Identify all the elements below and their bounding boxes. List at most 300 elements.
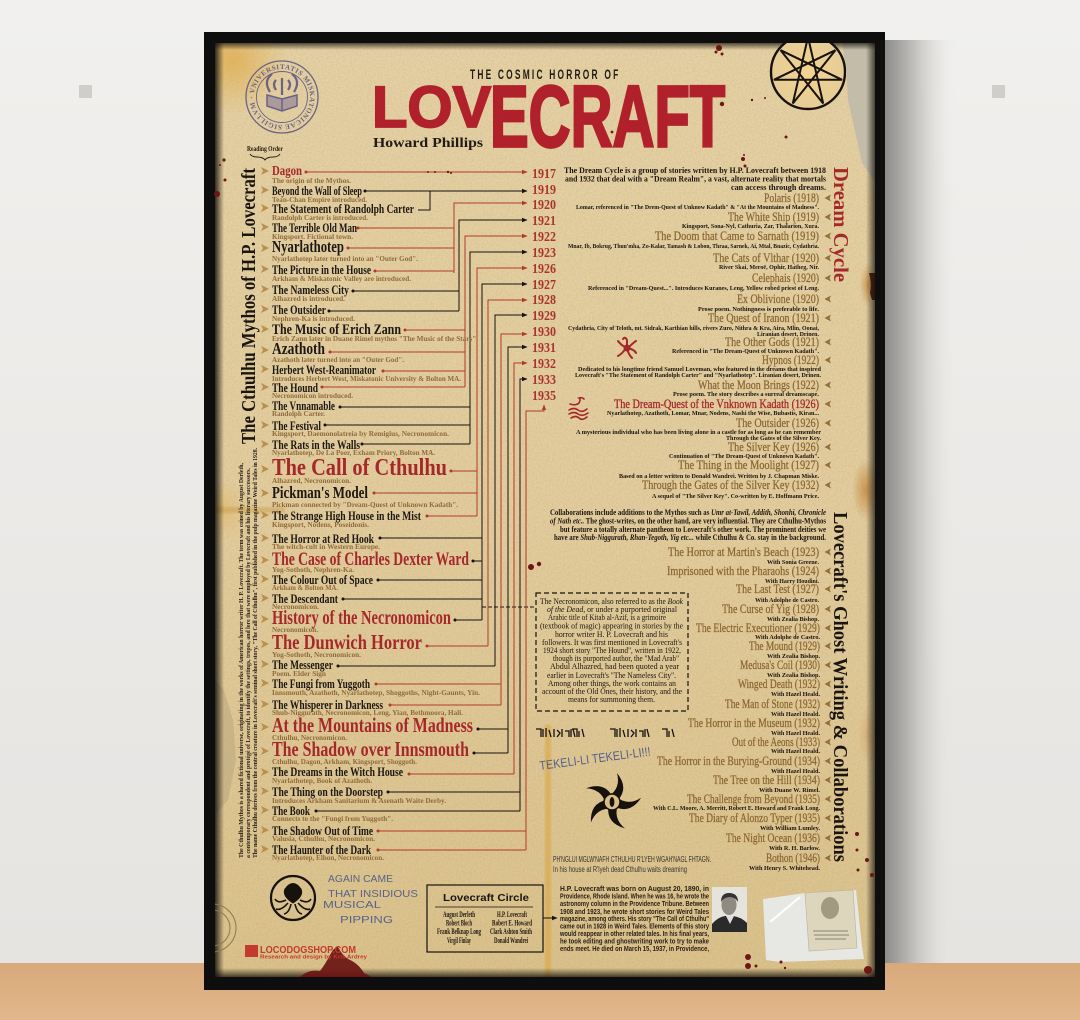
dream cycle story: Celephais [588, 271, 831, 292]
dream cycle intro text: can access through dreams. [731, 183, 826, 192]
collaboration: The Horror at Martin's Beach: With Sonia Greene. [767, 559, 819, 566]
vertical heading: Dream Cycle: Dream Cycle [829, 167, 853, 282]
poster frame [204, 32, 885, 990]
collaboration: The Curse of Yig: The Curse of Yig (1928) [722, 602, 819, 616]
callout: Necronomicon box: of the Dead, or under a purported original [547, 604, 678, 614]
publication years: 1933 [532, 373, 556, 388]
publication years: 1919 [532, 183, 556, 198]
mythos story: Herbert West-Reanimator: Introduces Herbert West, Miskatonic University & Bolton MA. [272, 375, 461, 383]
collaboration: The Last Test [736, 582, 831, 604]
dream cycle story: Hypnos: Lovecraft's "The Statement of Randolph Carter" and "Nyarlathotep". Liranian desert, Drinen. [575, 372, 821, 379]
biography text: he took editing and ghostwriting work to try to make [560, 938, 709, 946]
collaboration: Bothon: Bothon (1946) [766, 851, 820, 865]
panel: Lovecraft Circle: Lovecraft Circle [443, 892, 529, 904]
collaboration: The Man of Stone: With Hazel Heald. [771, 711, 820, 718]
publication years: 1921 [532, 214, 556, 229]
mythos story: Pickman's Model: Pickman's Model [272, 483, 368, 502]
mythos story: Herbert West-Reanimator [261, 363, 461, 383]
mythos story: The Dreams in the Witch House: The Dreams in the Witch House [272, 765, 403, 779]
mythos story: The Haunter of the Dark: Nyarlathotep, Elhon, Necronomicon. [272, 854, 384, 862]
mythos story: The Thing on the Doorstep: The Thing on the Doorstep [272, 785, 383, 799]
mythos story: The Messenger: The Messenger [272, 658, 333, 672]
handwritten: quote: THAT INSIDIOUS [328, 888, 418, 900]
collaboration: Medusa's Coil: With Zealia Bishop. [767, 672, 820, 679]
biography text: H.P. Lovecraft was born on August 20, 1890, in [560, 886, 709, 893]
collaboration: The Electric Executioner [696, 621, 831, 641]
mythos story: The Shadow over Innsmouth: The Shadow over Innsmouth [272, 737, 469, 761]
mythos story: The Shadow Out of Time: The Shadow Out of Time [272, 824, 373, 838]
mythos story: The Unnamable: Randolph Carter. [272, 410, 325, 418]
mythos story: Azathoth [261, 339, 404, 364]
mythos story: The Rats in the Walls: Nyarlathotep, De La Poer, Exham Priory, Bolton MA. [272, 449, 435, 457]
icon: swirling star eye [583, 773, 643, 832]
dream cycle story: Celephais: Referenced in "Dream-Quest...". Introduces Kuranes, Leng, Yellow robed priest of Leng. [588, 285, 819, 292]
mythos story: The Terrible Old Man [261, 221, 357, 241]
collaboration: The Electric Executioner: With Adolphe de Castro. [755, 634, 820, 641]
collaboration: The Diary of Alonzo Typer: The Diary of Alonzo Typer (1935) [689, 811, 820, 825]
mythos story: The Picture in the House: The Picture in the House [272, 263, 371, 277]
dream cycle story: The White Ship: Kingsport, Sona-Nyl, Cathuria, Zar, Thalarion, Xura. [682, 223, 819, 230]
mythos story: The Thing on the Doorstep: Introduces Arkham Sanitarium & Asenath Waite Derby. [272, 797, 446, 805]
mythos story: The Fungi from Yuggoth [261, 677, 480, 697]
collaboration: Imprisoned with the Pharaohs: With Harry Houdini. [765, 578, 819, 585]
dream cycle story: The Silver Key: Continuation of "The Dream-Quest of Unknown Kadath". [669, 453, 819, 460]
handwritten: Tekeli-li: TEKELI-LI TEKELI-LI!!! [539, 744, 651, 773]
mythos story: The Descendant: The Descendant [272, 592, 339, 606]
mythos story: Dagon [261, 164, 351, 185]
icon: Cthulhu emblem [271, 876, 315, 920]
dream cycle story: The Cats of Ulthar: The Cats of Vlthar (1920) [713, 251, 819, 265]
collaboration: The Challenge from Beyond: The Challenge from Beyond (1935) [687, 792, 820, 806]
dream cycle intro text [564, 166, 826, 192]
collaboration: Out of the Aeons: Out of the Aeons (1933) [732, 735, 820, 749]
biography text: came out in 1928 in Weird Tales. Elements of this story [560, 924, 709, 930]
mythos story: The Fungi from Yuggoth: Innsmouth, Azathoth, Nyarlathotep, Shoggoths, Night-Gaunts, Yin. [272, 689, 480, 697]
mythos story: At the Mountains of Madness [261, 713, 473, 742]
collaboration: The Diary of Alonzo Typer: With William Lumley. [760, 825, 820, 832]
mythos story: The Case of Charles Dexter Ward: The Case of Charles Dexter Ward [272, 549, 469, 570]
collaboration: The Man of Stone [725, 697, 831, 718]
mythos story: The Hound: Necronomicon introduced. [272, 392, 353, 400]
mythos story: Azathoth: Azathoth [272, 339, 325, 358]
icon: red wave glyph [569, 398, 588, 419]
collaborations intro text: have are Shub-Niggurath, Rhan-Tegoth, Yig etc... while Cthulhu & Co. stay in the background. [554, 533, 826, 542]
publication years: 1923 [532, 246, 556, 261]
mythos story: The Rats in the Walls [261, 438, 435, 457]
mythos story: The Whisperer in Darkness: Shub-Niggurath, Necronomicon, Leng, Yian, Bethmoora, Hali. [272, 709, 463, 717]
vertical heading: Ghost Writing and Collaborations: Lovecraft's Ghost Writing & Collaborations [829, 512, 851, 862]
collaboration: The Horror in the Burying-Ground: With Hazel Heald. [771, 768, 820, 775]
mythos story: The Festival: The Festival [272, 419, 321, 433]
publication years: 1922 [532, 230, 556, 245]
dream cycle intro text: and 1932 that deal with a "Dream Realm", a vast, alternate reality that mortals [565, 174, 826, 184]
handwritten: Cthulhu chant: In his house at R'lyeh dead Cthulhu waits dreaming [553, 865, 687, 874]
mythos story: The Descendant: Necronomicon. [272, 603, 319, 611]
icon: red tentacle star [618, 338, 636, 358]
mythos story: History of the Necronomicon: Necronomicon. [272, 626, 318, 634]
mythos story: The Outsider: Nephren-Ka is introduced. [272, 315, 355, 323]
collaboration: Winged Death: With Hazel Heald. [771, 691, 820, 698]
reading order timeline connectors [306, 172, 544, 850]
mythos story: The Outsider: The Outsider [272, 303, 326, 317]
callout: Necronomicon box: though its purported author, the "Mad Arab" [553, 653, 679, 663]
mythos story: The Horror at Red Hook [261, 532, 380, 551]
collaboration: The Curse of Yig: With Zealia Bishop. [767, 616, 819, 623]
mythos story: The Outsider [261, 303, 355, 323]
dream cycle intro text: The Dream Cycle is a group of stories written by H.P. Lovecraft between 1918 [564, 166, 826, 175]
necronomicon sign [771, 35, 845, 109]
mythos story: Dagon: Dagon [272, 164, 302, 179]
collaboration: The Night Ocean: With R. H. Barlow. [769, 845, 820, 852]
panel: Lovecraft Circle: Clark Ashton Smith [490, 927, 532, 936]
mythos story: The Strange High House in the Mist [261, 509, 422, 529]
mythos story: The Book: Connects to the "Fungi from Yuggoth". [272, 815, 393, 823]
collaborations intro text [550, 508, 826, 542]
reading order label [247, 144, 283, 160]
collaboration: The Tree on the Hill: The Tree on the Hill (1934) [713, 773, 820, 787]
handwritten: quote: AGAIN CAME [328, 873, 393, 885]
collaboration: The Mound: With Zealia Bishop. [767, 653, 820, 660]
mythos story: The Statement of Randolph Carter: Randolph Carter is introduced. [272, 214, 368, 222]
collaboration: Medusa's Coil [740, 658, 831, 679]
collaboration: Medusa's Coil: Medusa's Coil (1930) [740, 658, 820, 672]
collaboration: The Horror in the Museum [688, 716, 831, 737]
mythos story: The Dreams in the Witch House: Nyarlathotep, Book of Azathoth. [272, 777, 372, 785]
biography text [559, 886, 709, 953]
vertical heading: Cthulhu Mythos: The Cthulhu Mythos of H.P. Lovecraft [238, 168, 260, 444]
mythos story: The Nameless City [261, 283, 349, 303]
logo: locodogshop: LOCODOGSHOP.COM [260, 945, 356, 956]
mythos story: Dagon: The origin of the Mythos. [272, 177, 351, 185]
mythos story: The Hound [261, 381, 353, 400]
mythos story: The Thing on the Doorstep [261, 785, 446, 805]
mythos story: Azathoth: Azathoth later turned into an "Outer God". [272, 356, 404, 364]
mythos story: The Statement of Randolph Carter: The Statement of Randolph Carter [272, 202, 414, 216]
collaboration: Winged Death: Winged Death (1932) [738, 677, 820, 691]
dream cycle story: What the Moon Brings: What the Moon Brings (1922) [698, 378, 819, 392]
dream cycle story: Hypnos [575, 353, 831, 379]
callout: Necronomicon box: The Necronomicon, also referred to as the Book [540, 596, 683, 606]
biography text: magazine, among others. His story "The Call of Cthulhu" [560, 916, 709, 923]
aged paper sheet [177, 5, 880, 977]
publication years: 1935 [532, 389, 556, 404]
mythos story: The Unnamable [261, 399, 335, 418]
handwritten: quote: MUSICAL [323, 899, 381, 911]
dream cycle story: The Cats of Ulthar: River Skai, Meroë, Ophir, Hatheg, Nir. [719, 264, 819, 271]
logo: locodogshop [245, 945, 368, 960]
wooden shelf [0, 963, 1080, 1020]
mythos story: The Statement of Randolph Carter [261, 202, 414, 222]
mythos story: The Picture in the House: Arkham & Miskatonic Valley are introduced. [272, 275, 411, 283]
mythos story: The Horror at Red Hook: The witch-cult in Western Europe. [272, 543, 380, 551]
collaboration: The Electric Executioner: The Electric Executioner (1929) [696, 621, 820, 635]
mythos story: The Colour Out of Space [261, 573, 373, 592]
dream cycle story: The Dream-Quest of Unknown Kadath: Nyarlathotep, Azathoth, Lomar, Mnar, Nodens, Nashi the Wise, Bubastis, Kiran... [607, 410, 819, 417]
dream cycle story: The Thing in the Moonlight: The Thing in the Moolight (1927) [678, 458, 819, 472]
dream cycle story: Hypnos: Dedicated to his longtime friend Samuel Loveman, who featured in the dreams that inspired [578, 366, 821, 373]
dream cycle story: The Other Gods: Referenced in "The Dream-Quest of Unknown Kadath". [672, 348, 819, 355]
dream cycle story: The Doom that Came to Sarnath: Mnar, Ib, Bokrug, Thuu'mha, Zo-Kalar, Tamash & Lobon, Thraa, Sarnek, Ai, Mtal, Bnazic, Cydathria. [568, 243, 819, 250]
biography text: would reappear in other related tales. In his final years, [559, 931, 709, 938]
mythos story: The Horror at Red Hook: The Horror at Red Hook [272, 532, 375, 546]
mythos story: The Case of Charles Dexter Ward [261, 549, 469, 574]
header: Howard Phillips: Howard Phillips [373, 135, 483, 150]
mythos story: The Book [261, 804, 393, 823]
mythos story: The Dunwich Horror: The Dunwich Horror [272, 630, 422, 654]
publication years: 1928 [532, 293, 556, 308]
collaboration: The Last Test: The Last Test (1927) [736, 582, 819, 596]
wall plugs [79, 85, 1005, 98]
vertical text: mythos explanation: The Cthulhu Mythos is a shared fictional universe, originating in the works of American horror writer H. P. Lovecraft. The term was coined by August Derleth, [238, 463, 245, 858]
collaboration: The Tree on the Hill: With Duane W. Rimel. [759, 787, 820, 794]
collaboration: Bothon [749, 851, 831, 872]
publication years: 1932 [532, 357, 556, 372]
collaboration: The Night Ocean [726, 831, 831, 852]
pinned paper scraps with sketch [763, 890, 864, 962]
callout: Necronomicon box: Arabic title of Kitab al-Azif, is a grimoire [548, 612, 666, 622]
mythos story: The Terrible Old Man: The Terrible Old Man [272, 221, 357, 235]
blood splat bottom [300, 947, 372, 977]
portrait of Lovecraft [712, 887, 747, 932]
callout: Necronomicon box: followers. It was first mentioned in Lovecraft's [542, 637, 682, 647]
mythos story: The Festival: Kingsport, Daemonolatreia by Remigius, Necronomicon. [272, 430, 449, 438]
collaboration: Out of the Aeons: With Hazel Heald. [771, 748, 820, 755]
collaboration: The Mound [749, 639, 831, 660]
collaboration: Imprisoned with the Pharaohs [667, 564, 831, 585]
dream cycle story: Through the Gates of the Silver Key [642, 478, 831, 500]
mythos story: History of the Necronomicon [261, 607, 451, 634]
collaboration: The Challenge from Beyond: With C.L. Moore, A. Merritt, Robert E. Howard and Frank Long. [653, 805, 820, 812]
dream cycle story: The White Ship [682, 210, 831, 230]
handwritten: Cthulhu chant [553, 854, 711, 874]
publication years [532, 167, 556, 404]
collaboration: Winged Death [738, 677, 831, 698]
dream cycle story: The Cats of Ulthar [713, 251, 831, 271]
strange script row [536, 728, 674, 737]
dream cycle story: The White Ship: The White Ship (1919) [728, 210, 819, 224]
dream cycle story: The Outsider: A mysterious individual who has been living alone in a castle for as long as he can remember [576, 429, 821, 436]
mythos story: The Messenger [261, 658, 333, 678]
dream cycle story: The Silver Key: The Silver Key (1926) [728, 440, 819, 454]
publication years: 1931 [532, 341, 556, 356]
mythos story: The Call of Cthulhu: The Call of Cthulhu [272, 455, 447, 481]
mythos story: Beyond the Wall of Sleep: Tean-Chan Empire introduced. [272, 196, 367, 204]
dream cycle story: The Doom that Came to Sarnath: The Doom that Came to Sarnath (1919) [655, 229, 819, 243]
panel: Lovecraft Circle: H.P. Lovecraft [497, 910, 527, 919]
dream cycle story: Hypnos: Hypnos (1922) [762, 353, 819, 367]
collaboration: The Curse of Yig [722, 602, 831, 623]
mythos story: The Rats in the Walls: The Rats in the Walls [272, 438, 360, 452]
biography text: 1908 and 1923, he wrote short stories for Weird Tales [560, 909, 709, 916]
logo: locodogshop: Research and design by Kris Ardrey [260, 954, 368, 960]
callout: Necronomicon box: earlier in Lovecraft's "The Nameless City". [547, 670, 676, 680]
collaboration: The Last Test: With Adolphe de Castro. [755, 597, 819, 604]
collaboration: Out of the Aeons [732, 735, 831, 755]
mythos story: The Shadow Out of Time [261, 824, 375, 843]
university seal [245, 60, 319, 134]
dream cycle story: The Outsider: The Outsider (1926) [736, 416, 819, 430]
mythos story: The Messenger: Poem. Elder Sign [272, 670, 326, 678]
dream cycle story: The Thing in the Moonlight: Based on a letter written to Donald Wandrei. Written by J. Chapman Miske. [619, 473, 819, 480]
reading order label: Reading Order [247, 144, 283, 153]
mythos story: The Whisperer in Darkness [261, 698, 463, 717]
mythos story: Pickman's Model [261, 483, 458, 509]
panel: Lovecraft Circle: Robert Bloch [446, 918, 472, 928]
mythos story: The Dunwich Horror: Yog-Sothoth, Necronomicon. [272, 651, 361, 659]
collaborations intro text: of Nath etc.. The ghost-writes, on the other hand, are very influential. They are Cthulhu-Mythos [550, 516, 826, 526]
vertical text: mythos explanation [238, 448, 259, 858]
mythos story: The Hound: The Hound [272, 381, 318, 395]
publication years: 1920 [532, 198, 556, 213]
mythos story: The Colour Out of Space: Arkham & Bolton MA. [272, 584, 338, 592]
mythos story: The Terrible Old Man: Kingsport. Fictional town. [272, 233, 353, 241]
collaboration: The Horror in the Museum: The Horror in the Museum (1932) [688, 716, 820, 730]
mythos story: The Unnamable: The Vnnamable [272, 399, 335, 413]
callout: Necronomicon box: Among other things, the work contains an [548, 678, 677, 688]
panel: Lovecraft Circle [427, 885, 557, 952]
publication years: 1930 [532, 325, 556, 340]
collaboration: Bothon: With Henry S. Whitehead. [749, 865, 820, 872]
dream cycle story: The Quest of Iranon: Liranian desert, Drinen. [757, 331, 819, 338]
biography text: astronomy column in the Providence Tribune. Between [560, 901, 709, 908]
mythos story: The Picture in the House [261, 263, 411, 283]
mythos story: The Shadow over Innsmouth [261, 737, 469, 766]
dream cycle story: The Dream-Quest of Unknown Kadath: The Dream-Quest of the Vnknown Kadath (1926) [614, 397, 819, 411]
dream cycle story: The Outsider: Through the Gates of the Silver Key. [726, 435, 821, 442]
panel: Lovecraft Circle: Frank Belknap Long [437, 927, 482, 936]
mythos story: Pickman's Model: Pickman connected by "Dream-Quest of Unknown Kadath". [272, 501, 458, 509]
mythos story: The Haunter of the Dark [261, 843, 384, 862]
handwritten: quote [323, 873, 418, 926]
mythos story: The Strange High House in the Mist: The Strange High House in the Mist [272, 509, 422, 523]
handwritten: quote: PIPPING [340, 914, 393, 926]
mythos story: The Dunwich Horror [261, 630, 422, 659]
mythos story: Nyarlathotep [261, 237, 418, 263]
publication years: 1929 [532, 309, 556, 324]
dream cycle story: Polaris [576, 191, 831, 211]
publication years: 1917 [532, 167, 556, 182]
collaboration: The Man of Stone: The Man of Stone (1932) [725, 697, 820, 711]
publication years: 1927 [532, 278, 556, 293]
collaboration: The Challenge from Beyond [653, 792, 831, 812]
mythos story: The Music of Erich Zann [261, 322, 478, 343]
mythos story: At the Mountains of Madness: At the Mountains of Madness [272, 713, 473, 737]
biography text: Providence, Rhode Island. When he was 16, he wrote the [560, 894, 709, 900]
dream cycle story: Celephais: Celephais (1920) [752, 271, 819, 285]
mythos story: The Fungi from Yuggoth: The Fungi from Yuggoth [272, 677, 370, 691]
dream cycle story: What the Moon Brings [673, 378, 831, 398]
panel: Lovecraft Circle: Donald Wandrei [494, 936, 528, 945]
header: small title: THE COSMIC HORROR OF [470, 68, 618, 83]
collaboration: The Horror in the Museum: With Hazel Heald. [771, 730, 820, 737]
collaboration: The Horror in the Burying-Ground [657, 754, 831, 775]
callout: Necronomicon box: horror writer H. P. Lovecraft and his [555, 629, 668, 639]
mythos story: History of the Necronomicon: History of the Necronomicon [272, 607, 451, 629]
mythos story: The Dreams in the Witch House [261, 765, 403, 785]
mythos story: The Nameless City: Alhazred is introduced. [272, 295, 345, 303]
dream cycle story: What the Moon Brings: Prose poem. The story describes a surreal dreamscape. [673, 391, 819, 398]
dream cycle story: Polaris: Polaris (1918) [764, 191, 819, 205]
collaboration: The Mound: The Mound (1929) [749, 639, 820, 653]
publication years: 1926 [532, 262, 556, 277]
blood splatter specks [214, 45, 874, 974]
dream cycle story: Ex Oblivione [698, 292, 831, 313]
dream cycle story: Polaris: Lomar, referenced in "The Drem-Quest of Unknow Kadath" & "At the Mountains of Madness". [576, 204, 819, 211]
collaboration: The Diary of Alonzo Typer [689, 811, 831, 832]
collaborations intro text: Collaborations include additions to the Mythos such as Umr at-Tawil, Addith, Shonhi, Chronicle [550, 508, 826, 517]
dream cycle story: Ex Oblivione: Ex Oblivione (1920) [737, 292, 819, 306]
mythos story: The Whisperer in Darkness: The Whisperer in Darkness [272, 698, 383, 712]
mythos story: The Festival [261, 419, 449, 438]
mythos story: Herbert West-Reanimator: Herbert West-Reanimator [272, 363, 376, 377]
mythos story: Nyarlathotep: Nyarlathotep [272, 237, 344, 256]
header: LOVECRAFT wordmark: ECRAFT [490, 68, 725, 166]
mythos story: Nyarlathotep: Nyarlathotep later turned into an "Outer God". [272, 255, 418, 263]
collaboration: The Horror in the Burying-Ground: The Horror in the Burying-Ground (1934) [657, 754, 820, 768]
frame shadow on wall [885, 40, 955, 965]
dream cycle story: Through the Gates of the Silver Key: A sequel of "The Silver Key". Co-written by E. Hoffmann Price. [652, 493, 819, 500]
vertical text: mythos explanation: a contemporary correspondent and protégé of Lovecraft, to identify the settings, tropes, and lore that were employed by Lovecraft and his literary successors. [245, 468, 252, 858]
faded stamp bottom left [215, 904, 236, 952]
panel: Lovecraft Circle: August Derleth [443, 910, 475, 919]
mythos story: The Shadow Out of Time: Valusia, Cthulhu, Necronomicon. [272, 835, 375, 843]
mythos story: The Descendant [261, 592, 339, 611]
dream cycle story: The Doom that Came to Sarnath [568, 229, 831, 250]
dream cycle story: The Other Gods [672, 335, 831, 355]
collaboration: The Night Ocean: The Night Ocean (1936) [726, 831, 820, 845]
dream cycle story: Ex Oblivione: Prose poem. Nothingness is preferable to life. [698, 306, 819, 313]
dream cycle story: Through the Gates of the Silver Key: Through the Gates of the Silver Key (1932) [642, 478, 819, 492]
mythos story: The Strange High House in the Mist: Kingsport, Nodens, Poseidonis. [272, 521, 369, 529]
mythos story: Beyond the Wall of Sleep: Beyond the Wall of Sleep [272, 184, 362, 198]
header: LOVECRAFT wordmark [372, 68, 726, 166]
mythos story: The Music of Erich Zann: Erich Zann later in Duane Rimel mythos "The Music of the Stars". [272, 335, 478, 343]
mythos story: The Call of Cthulhu: Alhazred, Necronomicon. [272, 477, 351, 485]
dream cycle story: The Thing in the Moonlight [619, 458, 831, 480]
mythos story: At the Mountains of Madness: Cthulhu, Necronomicon. [272, 734, 347, 742]
vertical text: mythos explanation: The name Cthulhu derives from the central creature in Lovecraft's seminal short story, "The Call of Cthulhu", first published in the pulp magazine Weird Tales in 1928. [252, 448, 259, 858]
collaboration: Imprisoned with the Pharaohs: Imprisoned with the Pharaohs (1924) [667, 564, 819, 578]
callout: Necronomicon box: account of the Old Ones, their history, and the [542, 686, 682, 696]
callout: Necronomicon box: Abdul Alhazred, had been quoted a year [550, 661, 679, 671]
dream cycle story: The Quest of Iranon [568, 311, 831, 338]
panel: Lovecraft Circle: Robert E. Howard [492, 918, 532, 928]
mythos story: The Case of Charles Dexter Ward: Yog-Sothoth, Nephren-Ka. [272, 566, 354, 574]
callout: Necronomicon box: (textbook of magic) appearing in stories by the [540, 620, 683, 630]
callout: Necronomicon box: means for summoning them. [568, 694, 655, 704]
mythos story: The Shadow over Innsmouth: Cthulhu, Dagon, Arkham, Kingsport, Shoggoth. [272, 758, 417, 766]
dream cycle story: The Quest of Iranon: Cydathria, City of Teloth, mt. Sidrak, Karthian hills, rivers Zuro, Nithra & Kra, Aira, Mlin, Oonai, [568, 325, 819, 332]
mythos story: The Nameless City: The Nameless City [272, 283, 349, 297]
collaborations intro text: but feature a totally alternate pantheon to Lovecraft's other work. The prominent deities we [560, 525, 826, 534]
dream cycle story: The Other Gods: The Other Gods (1921) [725, 335, 819, 349]
dream cycle story: The Quest of Iranon: The Quest of Iranon (1921) [708, 311, 819, 325]
collaboration: The Tree on the Hill [713, 773, 831, 794]
panel: Lovecraft Circle: Virgil Finlay [447, 936, 471, 945]
dream cycle story: The Outsider [576, 416, 831, 442]
dream cycle story: The Dream-Quest of Unknown Kadath [607, 397, 831, 417]
mythos story: The Colour Out of Space: The Colour Out of Space [272, 573, 373, 587]
biography text: ends meet. He died on March 15, 1937, in Providence, [560, 946, 709, 953]
collaboration: The Horror at Martin's Beach: The Horror at Martin's Beach (1923) [668, 545, 819, 559]
mythos story: The Haunter of the Dark: The Haunter of the Dark [272, 843, 372, 857]
collaboration: The Horror at Martin's Beach [668, 545, 831, 566]
handwritten: Cthulhu chant: PH'NGLUI MGLW'NAFH CTHULHU R'LYEH WGAH'NAGL FHTAGN. [553, 854, 711, 864]
dream cycle story: The Silver Key [669, 440, 831, 460]
callout: Necronomicon box: 1924 short story "The Hound", written in 1922, [543, 645, 681, 655]
callout: Necronomicon box [536, 593, 688, 711]
header: LOVECRAFT wordmark: LOV [372, 75, 491, 140]
